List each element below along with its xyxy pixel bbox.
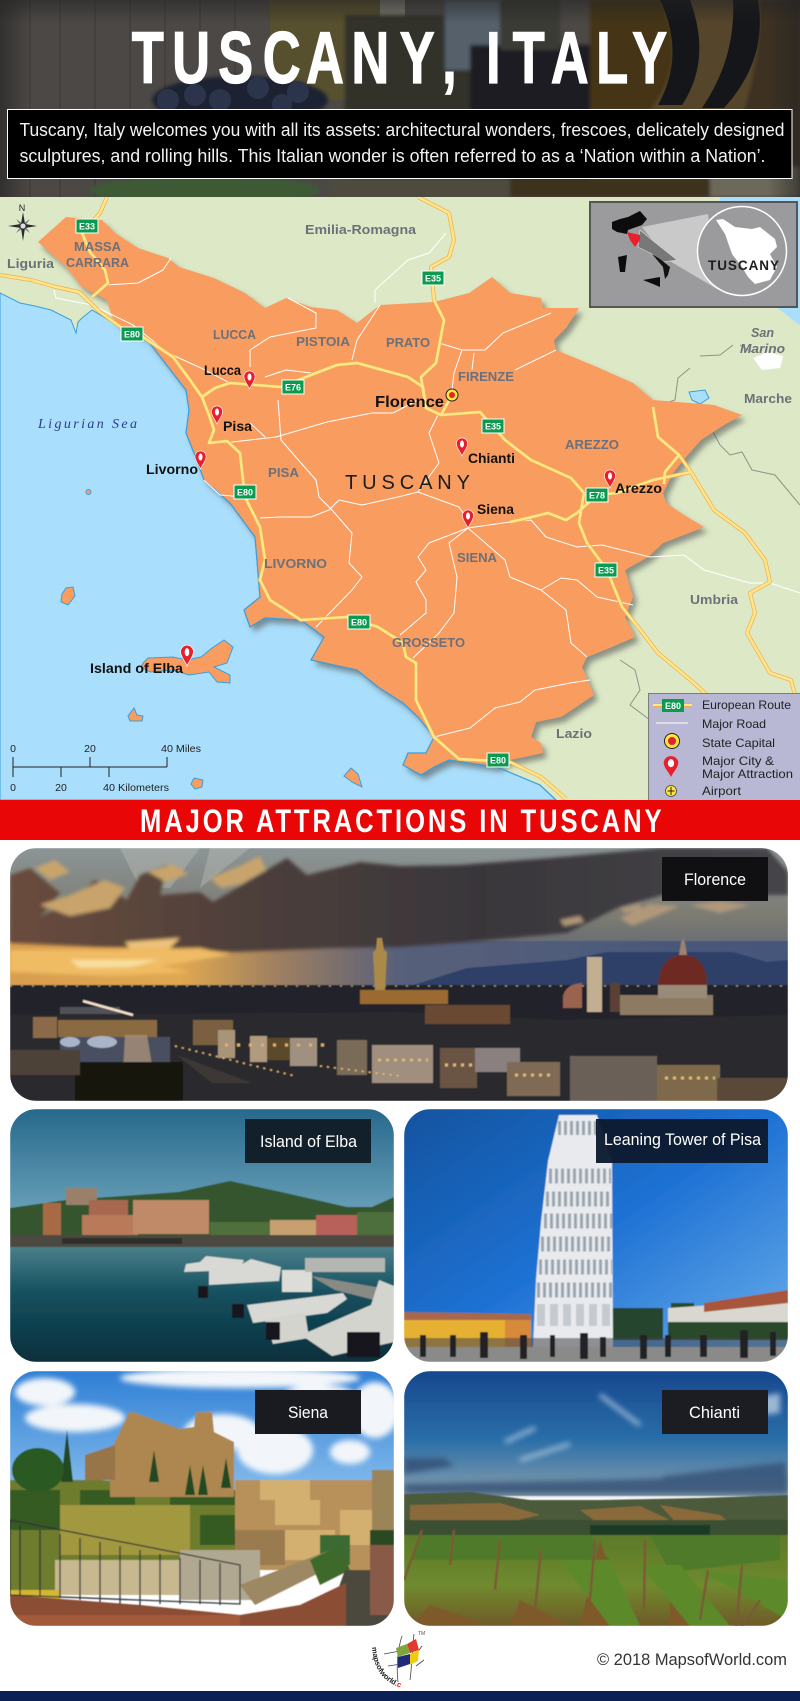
city labels: Lucca [204, 363, 241, 378]
legend: major city and attraction: Major City & [702, 754, 774, 768]
Florence rows of buildings [193, 1020, 233, 1045]
district and neighbour labels: CARRARA [66, 255, 130, 270]
district and neighbour labels: GROSSETO [392, 635, 465, 650]
Tuscany silhouette [716, 219, 777, 284]
buildings behind fence [55, 1560, 185, 1595]
scale bar: 40 Miles [161, 743, 201, 755]
label: Chianti [662, 1390, 768, 1434]
Tuscany region [38, 217, 742, 775]
neighbouring region borders [620, 345, 800, 720]
intro text box: sculptures, and rolling hills. This Italian wonder is often referred to as a ‘Nation within a Nation’. [20, 146, 766, 166]
section band: major attractions [0, 800, 800, 840]
legend: European route: E80 [665, 701, 681, 711]
town [235, 1480, 380, 1570]
city labels: Siena [477, 502, 514, 517]
district and neighbour labels: PRATO [386, 335, 430, 350]
district and neighbour labels: MASSA [74, 239, 122, 254]
route shields: E80 [351, 618, 367, 628]
distant hills [404, 1492, 788, 1540]
district and neighbour labels: PISA [268, 465, 300, 480]
copyright: © 2018 MapsofWorld.com [597, 1650, 787, 1669]
legend: major city and attraction [664, 754, 793, 781]
district and neighbour labels: LIVORNO [264, 556, 327, 571]
MapsofWorld logo: mapsofworld.com [372, 1647, 401, 1688]
legend: airport: Airport [702, 784, 742, 798]
route shields: E35 [485, 422, 501, 432]
label: Florence [662, 857, 768, 901]
surrounding buildings and trees [404, 1320, 531, 1347]
horizon lights [10, 985, 788, 987]
label: Island of Elba [245, 1119, 371, 1163]
route shields: E80 [124, 330, 140, 340]
route shields: E80 [237, 488, 253, 498]
scale bar: 0 [10, 743, 16, 755]
district and neighbour labels: Marche [744, 391, 792, 406]
region name: TUSCANY [345, 472, 470, 494]
route shields: E33 [79, 222, 95, 232]
label: Leaning Tower of Pisa: Leaning Tower of Pisa [604, 1130, 762, 1149]
scale bar: 0 [10, 782, 16, 794]
major roads [54, 233, 800, 737]
photo: Island of Elba [10, 1109, 394, 1362]
Italy silhouette [638, 230, 677, 262]
label: Island of Elba: Island of Elba [260, 1132, 358, 1151]
route shields: E76 [285, 382, 301, 392]
route shields: E35 [425, 274, 441, 284]
vine posts [404, 1530, 760, 1630]
city labels: Livorno [146, 462, 198, 477]
legend: European route: European Route [702, 698, 791, 712]
compass rose [8, 203, 37, 241]
map of Tuscany [0, 197, 800, 800]
route shields: E35 [598, 566, 614, 576]
compass rose: N [19, 203, 25, 213]
glow on horizon [10, 941, 788, 986]
San Marino [753, 352, 783, 370]
scale bar: 20 [84, 743, 96, 755]
title: TUSCANY, ITALY [132, 18, 667, 99]
Palazzo Vecchio [373, 938, 387, 992]
label: Leaning Tower of Pisa [596, 1119, 768, 1163]
legend: airport [665, 785, 741, 798]
section band: major attractions: MAJOR ATTRACTIONS IN TUSCANY [140, 804, 662, 840]
district and neighbour labels [7, 222, 792, 741]
legend: major road [656, 720, 766, 730]
Adriatic sea corner [720, 197, 800, 325]
coast outline [122, 328, 556, 800]
route shields: E80 [490, 756, 506, 766]
tower [533, 1115, 613, 1347]
intro text box: Tuscany, Italy welcomes you with all its assets: architectural wonders, frescoes, delicately designed [20, 120, 784, 140]
legend: European route [653, 698, 791, 712]
legend [648, 694, 800, 800]
legend: major city and attraction: Major Attraction [702, 767, 793, 781]
photo: Florence [10, 848, 788, 1101]
district and neighbour labels: FIRENZE [458, 369, 514, 384]
European routes [0, 197, 795, 799]
district and neighbour labels: Liguria [7, 256, 55, 271]
district and neighbour labels: Emilia-Romagna [305, 222, 417, 237]
sea label: Ligurian Sea [37, 417, 137, 432]
route shields [76, 219, 617, 767]
hillside [10, 1480, 260, 1600]
cloud bank [10, 848, 788, 976]
Ponte Vecchio and river [33, 1017, 57, 1038]
city labels: Chianti [468, 451, 515, 466]
photo: Siena [10, 1368, 399, 1626]
vineyard [404, 1535, 788, 1626]
legend: major road: Major Road [702, 717, 766, 731]
dock [311, 1276, 394, 1305]
district and neighbour labels: PISTOIA [296, 334, 351, 349]
city pins [181, 371, 616, 666]
basilica [110, 1411, 234, 1497]
label: Siena [255, 1390, 361, 1434]
city labels: Florence [375, 394, 444, 411]
inset locator map: TUSCANY [708, 258, 779, 273]
inset locator map [590, 202, 797, 307]
city labels: Island of Elba [90, 661, 184, 676]
cypress and trees [61, 1430, 231, 1495]
sun rays [120, 848, 250, 888]
Duomo [563, 983, 582, 1008]
iron fence [10, 1520, 240, 1606]
label: Chianti: Chianti [689, 1403, 740, 1422]
sea [0, 293, 556, 800]
label: Florence: Florence [684, 870, 746, 889]
district and neighbour labels: Lazio [556, 726, 592, 741]
city mass [10, 984, 788, 1021]
city labels: Arezzo [615, 481, 662, 496]
mountains [414, 952, 788, 986]
intro text box [8, 110, 792, 178]
photo: Chianti [404, 1371, 788, 1630]
photo: Leaning Tower of Pisa [404, 1109, 788, 1362]
city labels [90, 363, 662, 676]
scale bar: 20 [55, 782, 67, 794]
district and neighbour labels: AREZZO [565, 437, 619, 452]
MapsofWorld logo [372, 1631, 425, 1688]
route shields: E78 [589, 490, 605, 500]
district and neighbour labels: Umbria [690, 592, 739, 607]
state capital marker: Florence [446, 389, 458, 401]
footer bar [0, 1691, 800, 1701]
city labels: Pisa [223, 419, 253, 434]
district and neighbour labels: Marino [740, 341, 785, 356]
district and neighbour labels: SIENA [457, 550, 498, 565]
legend: state capital [664, 734, 775, 750]
lane and brick wall [325, 1570, 395, 1626]
scale bar: 40 Kilometers [103, 782, 169, 794]
legend: state capital: State Capital [702, 736, 775, 750]
islands [61, 490, 362, 789]
label: Siena: Siena [288, 1403, 328, 1422]
district and neighbour labels: San [751, 325, 774, 340]
header banner with wine photo background [0, 0, 800, 204]
scale bar [10, 743, 201, 794]
district and neighbour labels: LUCCA [213, 327, 257, 342]
MapsofWorld logo: TM [418, 1631, 425, 1637]
lake [689, 390, 709, 404]
moored boats [184, 1256, 347, 1323]
